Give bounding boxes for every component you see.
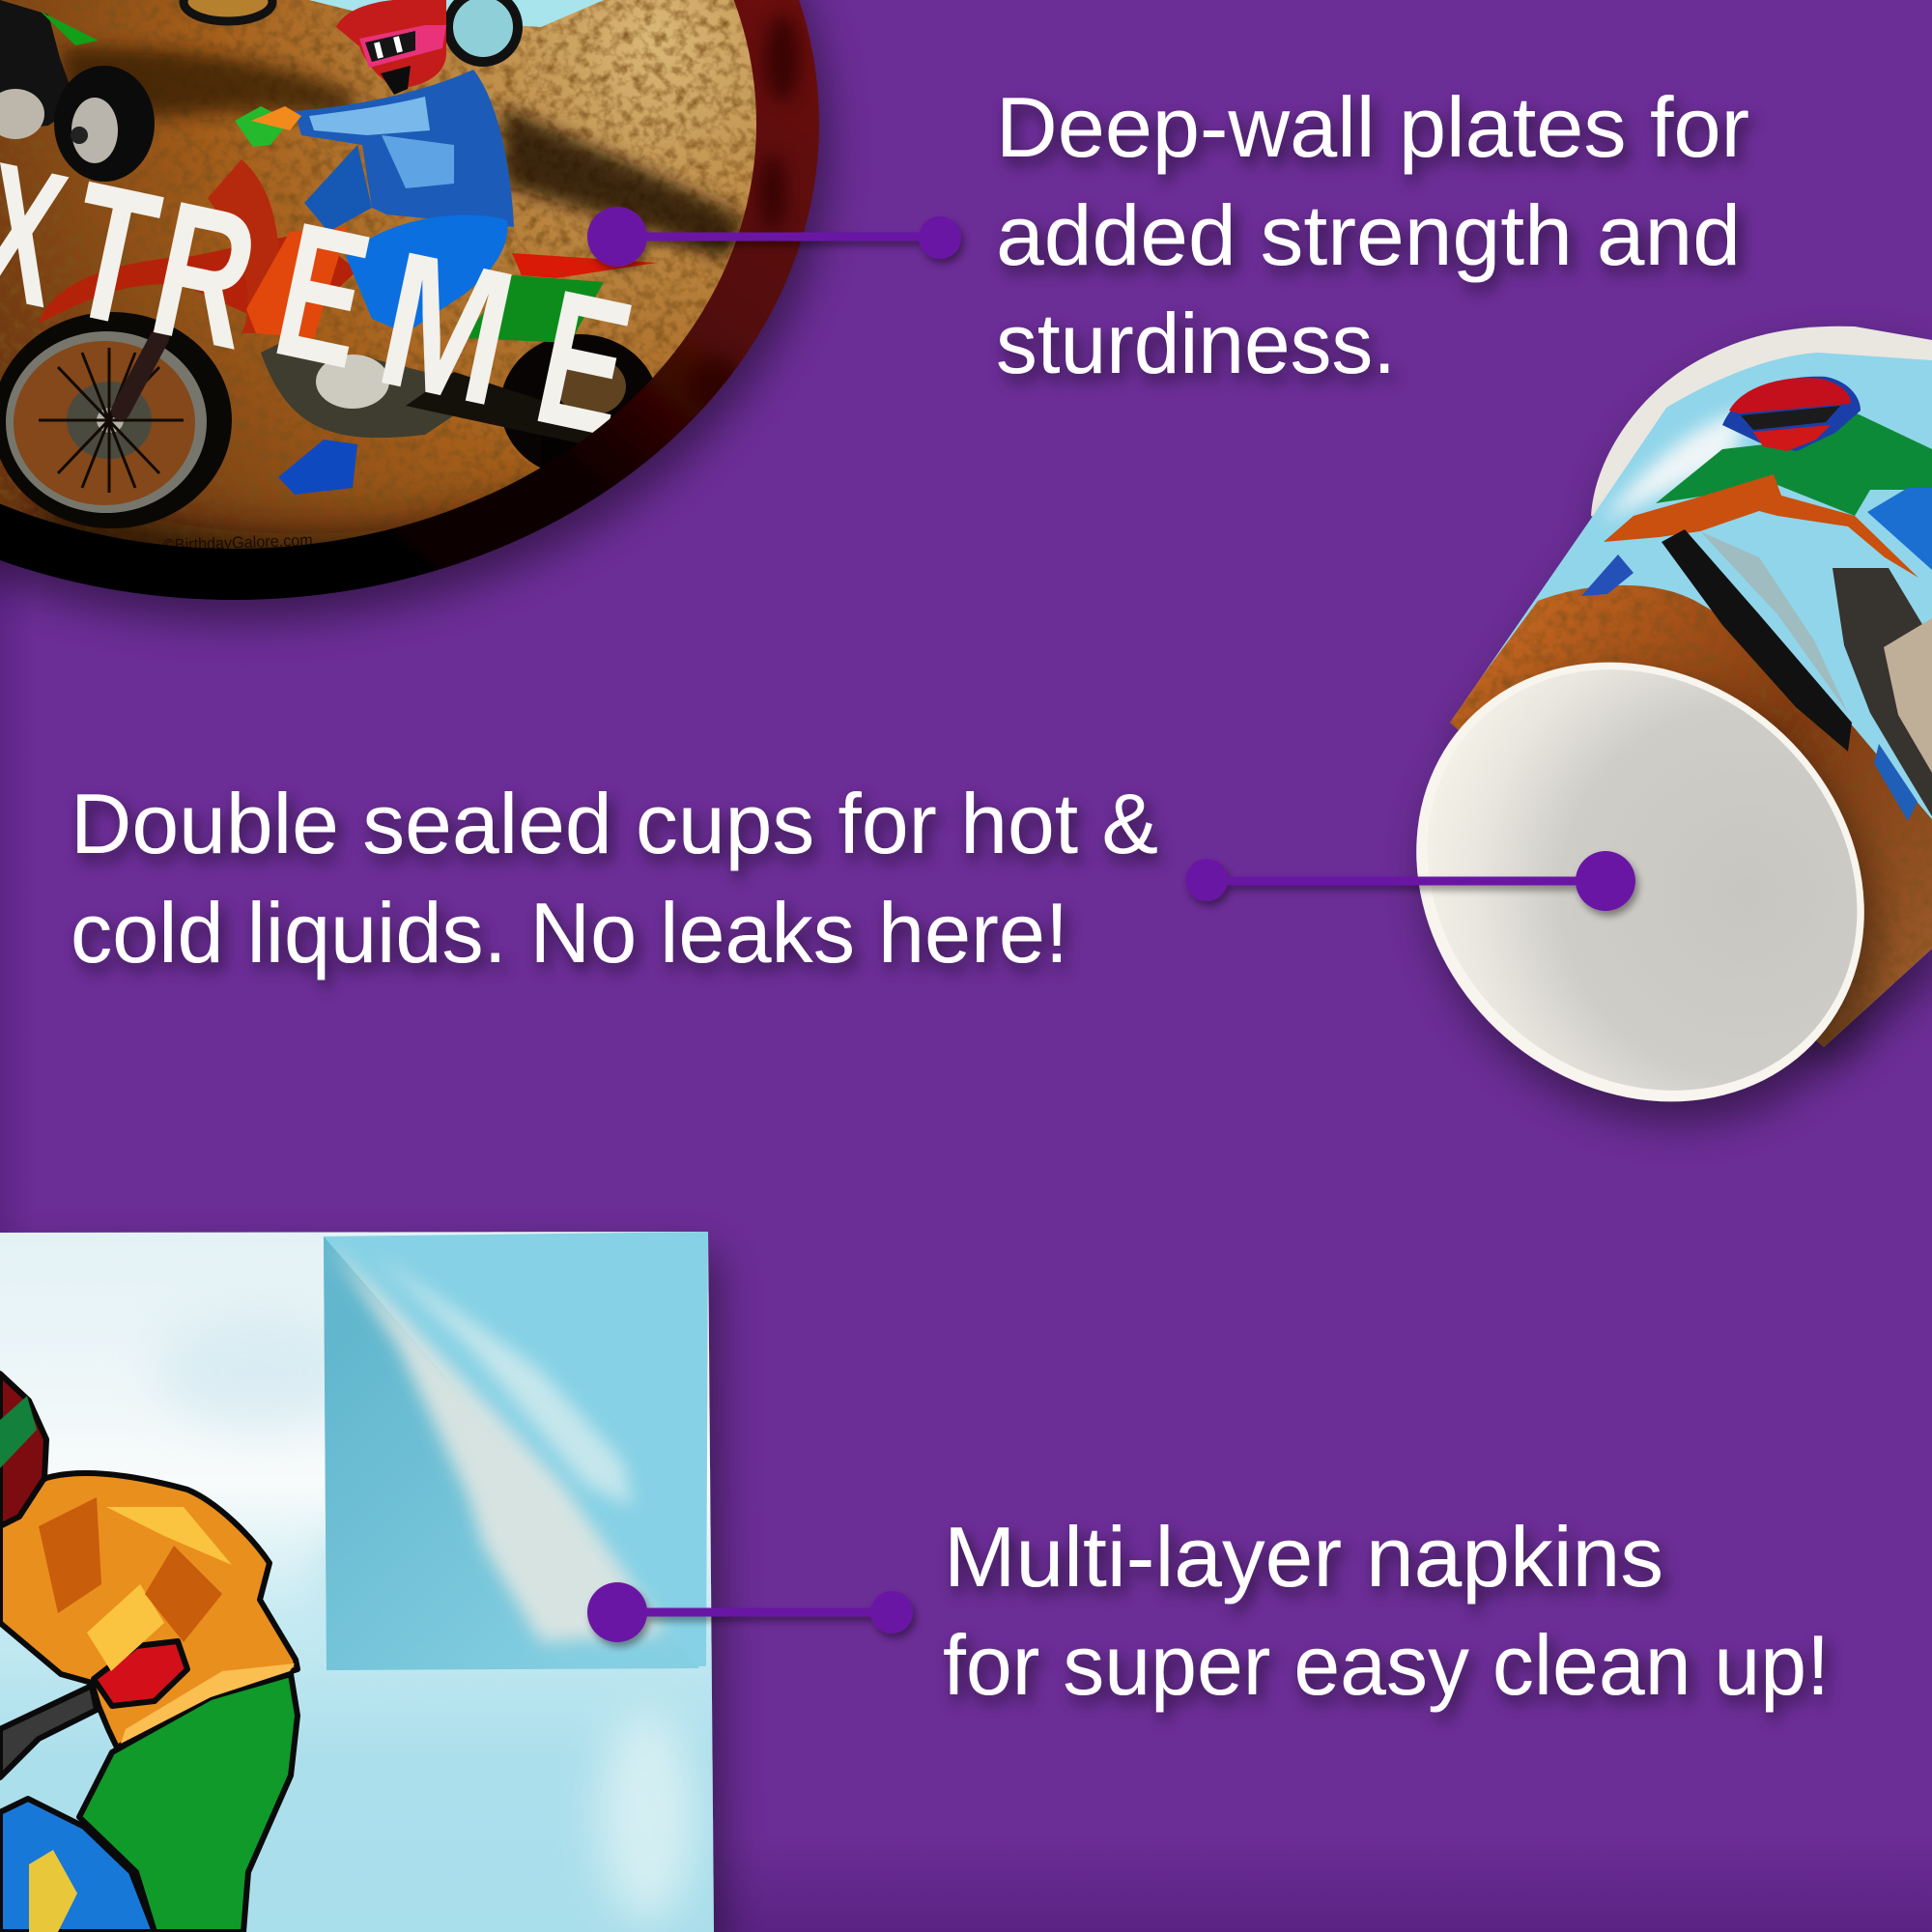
rider helmet — [0, 1374, 46, 1526]
back wheel top — [184, 0, 518, 62]
text: napkins — [943, 1509, 1830, 1713]
bike body — [39, 159, 657, 454]
rider knee — [0, 1799, 155, 1932]
plate — [0, 0, 819, 600]
left bike — [0, 0, 155, 182]
text: napkins: Multi-layer napkins — [944, 1509, 1663, 1605]
XTREME lettering: R — [136, 161, 273, 391]
helmet — [336, 0, 446, 95]
XTREME lettering — [0, 162, 632, 433]
rider glove — [94, 1641, 187, 1706]
napkin sheet — [0, 1232, 714, 1932]
rider helmet stripe — [0, 1396, 37, 1468]
dark dirt swoosh — [62, 47, 357, 121]
cup rider helmet — [1722, 377, 1861, 451]
shirt highlights — [87, 1507, 232, 1671]
plate artwork — [0, 0, 756, 549]
text: cups: Double sealed cups for hot & — [71, 776, 1158, 871]
cup body — [1450, 353, 1932, 1047]
copyright mark: ©BirthdayGalore.com — [162, 531, 313, 554]
text: cups — [71, 776, 1158, 980]
callout line: plate — [587, 207, 961, 267]
cup base — [1326, 572, 1932, 1192]
cup — [1405, 325, 1932, 1146]
cup rim — [1591, 327, 1932, 541]
cup bike spokes — [1700, 531, 1848, 713]
napkin — [0, 1232, 714, 1932]
napkin rider — [0, 1374, 298, 1932]
rim mottling — [686, 14, 800, 415]
text: plates: Deep-wall plates for — [996, 79, 1749, 175]
text: plates: added strength and — [996, 187, 1741, 283]
text: cups: cold liquids. No leaks here! — [71, 885, 1068, 980]
cup bike tire — [1662, 529, 1852, 752]
XTREME lettering: M — [363, 210, 530, 446]
rider — [235, 70, 514, 495]
cup bike fender — [1604, 474, 1918, 578]
rider handlebar — [0, 1686, 97, 1777]
XTREME lettering: T — [51, 142, 174, 369]
rider pants — [79, 1674, 298, 1932]
rider shirt — [0, 1473, 298, 1747]
cup dirt band — [1450, 585, 1932, 1047]
napkin watercolor patches — [155, 1314, 367, 1430]
cup engine — [1833, 568, 1932, 816]
text: plates: sturdiness. — [996, 296, 1396, 391]
text: plates — [996, 79, 1749, 391]
callout line: napkin — [587, 1582, 913, 1642]
cup rider jersey — [1656, 412, 1932, 516]
XTREME lettering: E — [260, 181, 385, 410]
callout line: cup — [1185, 851, 1635, 911]
plate rim — [0, 0, 819, 600]
cup shadow — [1450, 483, 1932, 1047]
napkin fold — [324, 1232, 708, 1670]
cup left hand — [1581, 554, 1634, 596]
rear wheel — [502, 334, 653, 468]
sky — [309, 0, 604, 27]
front wheel — [0, 312, 232, 528]
XTREME lettering: E — [521, 248, 648, 477]
text: napkins: for super easy clean up! — [943, 1617, 1830, 1713]
